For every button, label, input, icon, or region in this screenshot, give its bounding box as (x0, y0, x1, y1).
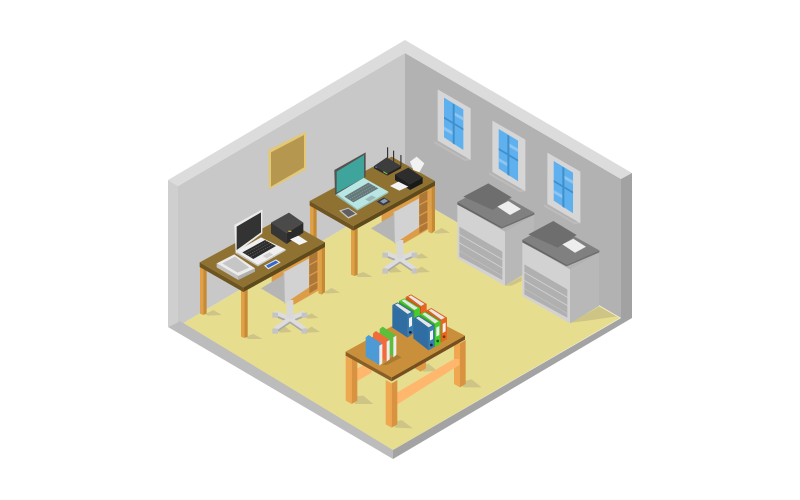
calculator (377, 197, 391, 206)
binder green front (420, 312, 441, 347)
printer (390, 157, 424, 191)
book green (380, 327, 396, 357)
binder orange front (426, 308, 447, 342)
window 3 (544, 153, 580, 224)
wall top edge (168, 40, 632, 186)
binder blue front (413, 316, 434, 350)
wall picture (268, 132, 306, 189)
window 2 (489, 121, 525, 192)
paper tray (217, 254, 255, 280)
chair (261, 258, 320, 334)
chair (371, 198, 430, 274)
table with books and binders (346, 294, 482, 428)
phone (264, 259, 281, 269)
drawer unit (272, 247, 318, 305)
router (374, 147, 401, 176)
tablet (339, 208, 358, 219)
copier 1 (457, 183, 534, 286)
table top (346, 312, 465, 381)
binder orange back (406, 294, 427, 329)
desk top (310, 157, 435, 231)
front desk with laptop, tray and printer (200, 209, 340, 339)
right wall (405, 53, 621, 318)
floor slab right edge (393, 318, 632, 459)
binder blue back (392, 302, 413, 338)
copier 2 (522, 221, 617, 323)
room shell (168, 40, 632, 459)
left wall end face (168, 180, 178, 327)
floor slab left edge (168, 321, 393, 459)
binder green back (399, 298, 420, 333)
desk top (200, 218, 325, 292)
floor (180, 192, 620, 450)
book orange (373, 331, 390, 362)
right wall end face (621, 173, 632, 318)
drawer unit (382, 187, 428, 243)
book blue (366, 335, 382, 366)
laptop (234, 209, 286, 266)
laptop (334, 152, 388, 211)
printer (271, 213, 308, 245)
back desk with laptop, router and printer (310, 147, 450, 277)
window 1 (434, 89, 471, 161)
left wall (178, 53, 405, 325)
books shadow (382, 354, 402, 365)
